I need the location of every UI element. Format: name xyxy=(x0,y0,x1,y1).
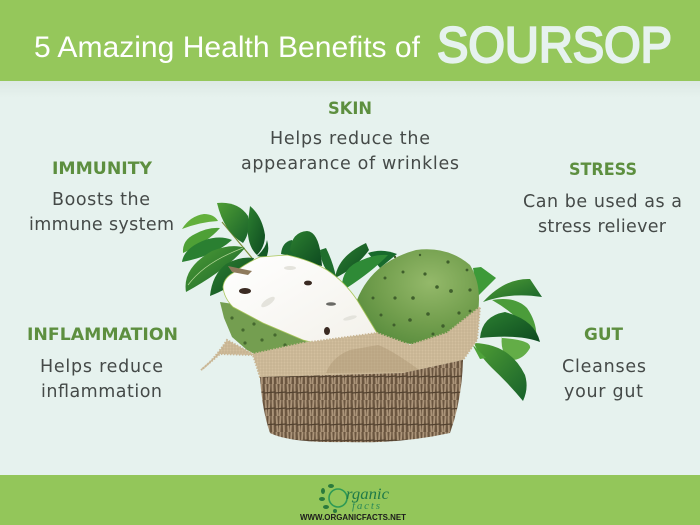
benefit: inflammation: Helps reduce xyxy=(40,357,163,377)
logo: organic facts: rganic xyxy=(346,486,389,503)
benefit: inflammation xyxy=(27,325,178,402)
whole soursop fruit xyxy=(357,249,479,345)
logo icon: leaf ring xyxy=(319,484,337,513)
benefit: immunity: IMMUNITY xyxy=(52,159,153,178)
seeds xyxy=(239,281,336,335)
illustration: soursop basket xyxy=(182,203,542,442)
benefit: inflammation: INFLAMMATION xyxy=(27,325,178,344)
benefit: gut: GUT xyxy=(584,325,624,344)
footer band xyxy=(0,475,700,525)
title: SOURSOP xyxy=(437,17,672,73)
burlap cloth xyxy=(201,307,480,377)
benefit: inflammation: inflammation xyxy=(41,382,162,402)
halved soursop fruit xyxy=(220,255,377,361)
benefit: skin: Helps reduce the xyxy=(270,129,430,149)
fruit spines xyxy=(372,254,472,336)
header band xyxy=(0,0,700,81)
benefit: stress: Can be used as a xyxy=(523,192,682,212)
title: 5 Amazing Health Benefits of xyxy=(34,31,421,64)
benefit: skin: appearance of wrinkles xyxy=(241,154,459,174)
logo: organic facts: facts xyxy=(352,500,380,512)
leaves: top left sprig xyxy=(182,203,268,296)
benefit: immunity: Boosts the xyxy=(52,190,150,210)
benefit: immunity: immune system xyxy=(29,215,174,235)
title xyxy=(34,17,672,73)
benefit: stress xyxy=(523,160,682,237)
benefit: gut xyxy=(562,325,646,402)
benefit: stress: stress reliever xyxy=(538,217,667,237)
logo: organic facts xyxy=(300,484,406,522)
leaves: centre xyxy=(281,231,397,291)
leaves: right xyxy=(472,267,542,401)
benefit: stress: STRESS xyxy=(569,160,637,179)
benefit: skin xyxy=(241,99,459,174)
benefit: skin: SKIN xyxy=(328,99,372,118)
website: WWW.ORGANICFACTS.NET xyxy=(300,513,406,522)
benefit: immunity xyxy=(29,159,174,235)
wicker basket xyxy=(260,360,463,442)
stem xyxy=(228,266,252,275)
benefit: gut: Cleanses xyxy=(562,357,646,377)
flesh fibres xyxy=(260,266,357,322)
benefit: gut: your gut xyxy=(564,382,643,402)
burlap knot xyxy=(326,345,422,373)
